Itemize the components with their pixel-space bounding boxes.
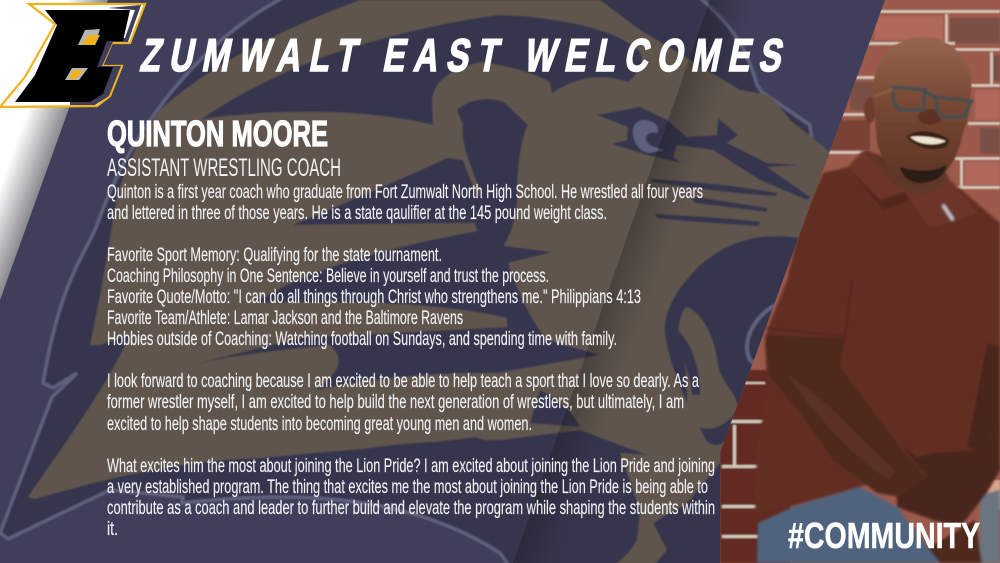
intro paragraph [107, 181, 703, 224]
coaching paragraph [107, 370, 699, 435]
mustache and smile [906, 131, 950, 149]
favorites list: Coaching Philosophy in One Sentence: Believe in yourself and trust the process. [107, 265, 549, 287]
photo of coach Quinton Moore [700, 0, 1000, 563]
favorites list: Favorite Sport Memory: Qualifying for the state tournament. [107, 244, 442, 266]
favorites list: Favorite Quote/Motto: "I can do all things through Christ who strengthens me." Philippians 4:13 [107, 286, 641, 308]
left arm [765, 335, 927, 497]
Lion Pride paragraph: it. [107, 518, 118, 540]
glasses [875, 87, 971, 117]
coaching paragraph: excited to help shape students into becoming great young men and women. [107, 413, 532, 435]
sleeve hem [767, 280, 852, 336]
hands [897, 430, 1000, 527]
job title: ASSISTANT WRESTLING COACH [107, 154, 341, 182]
name heading: QUINTON MOORE [107, 113, 328, 154]
right arm [967, 343, 1000, 450]
coaching paragraph: former wrestler myself, I am excited to help build the next generation of wrestlers, but ultimately, I am [107, 391, 684, 413]
Lion Pride paragraph: contribute as a coach and leader to further build and elevate the program while shaping the students within [107, 497, 715, 519]
white corner wedge [0, 0, 108, 300]
ear [864, 97, 876, 123]
favorites list: Favorite Team/Athlete: Lamar Jackson and the Baltimore Ravens [107, 307, 463, 329]
fold shading [513, 0, 740, 563]
beard [900, 165, 946, 183]
Lion Pride paragraph [107, 455, 715, 540]
favorites list [107, 244, 641, 350]
intro paragraph: and lettered in three of those years. He is a state qaulifier at the 145 pound weight class. [107, 202, 607, 224]
collar [848, 150, 977, 227]
brick wall [720, 10, 1000, 563]
shirt [755, 150, 1000, 513]
neck [877, 160, 947, 195]
nose [918, 109, 942, 125]
coaching paragraph: I look forward to coaching because I am excited to be able to help teach a sport that I love so dearly. As a [107, 370, 699, 392]
jeans [757, 487, 943, 563]
favorites list: Hobbies outside of Coaching: Watching football on Sundays, and spending time with family. [107, 328, 617, 350]
title: ZUMWALT EAST WELCOMES [137, 29, 788, 81]
logo: Zumwalt East E [0, 4, 145, 107]
head [873, 37, 972, 183]
